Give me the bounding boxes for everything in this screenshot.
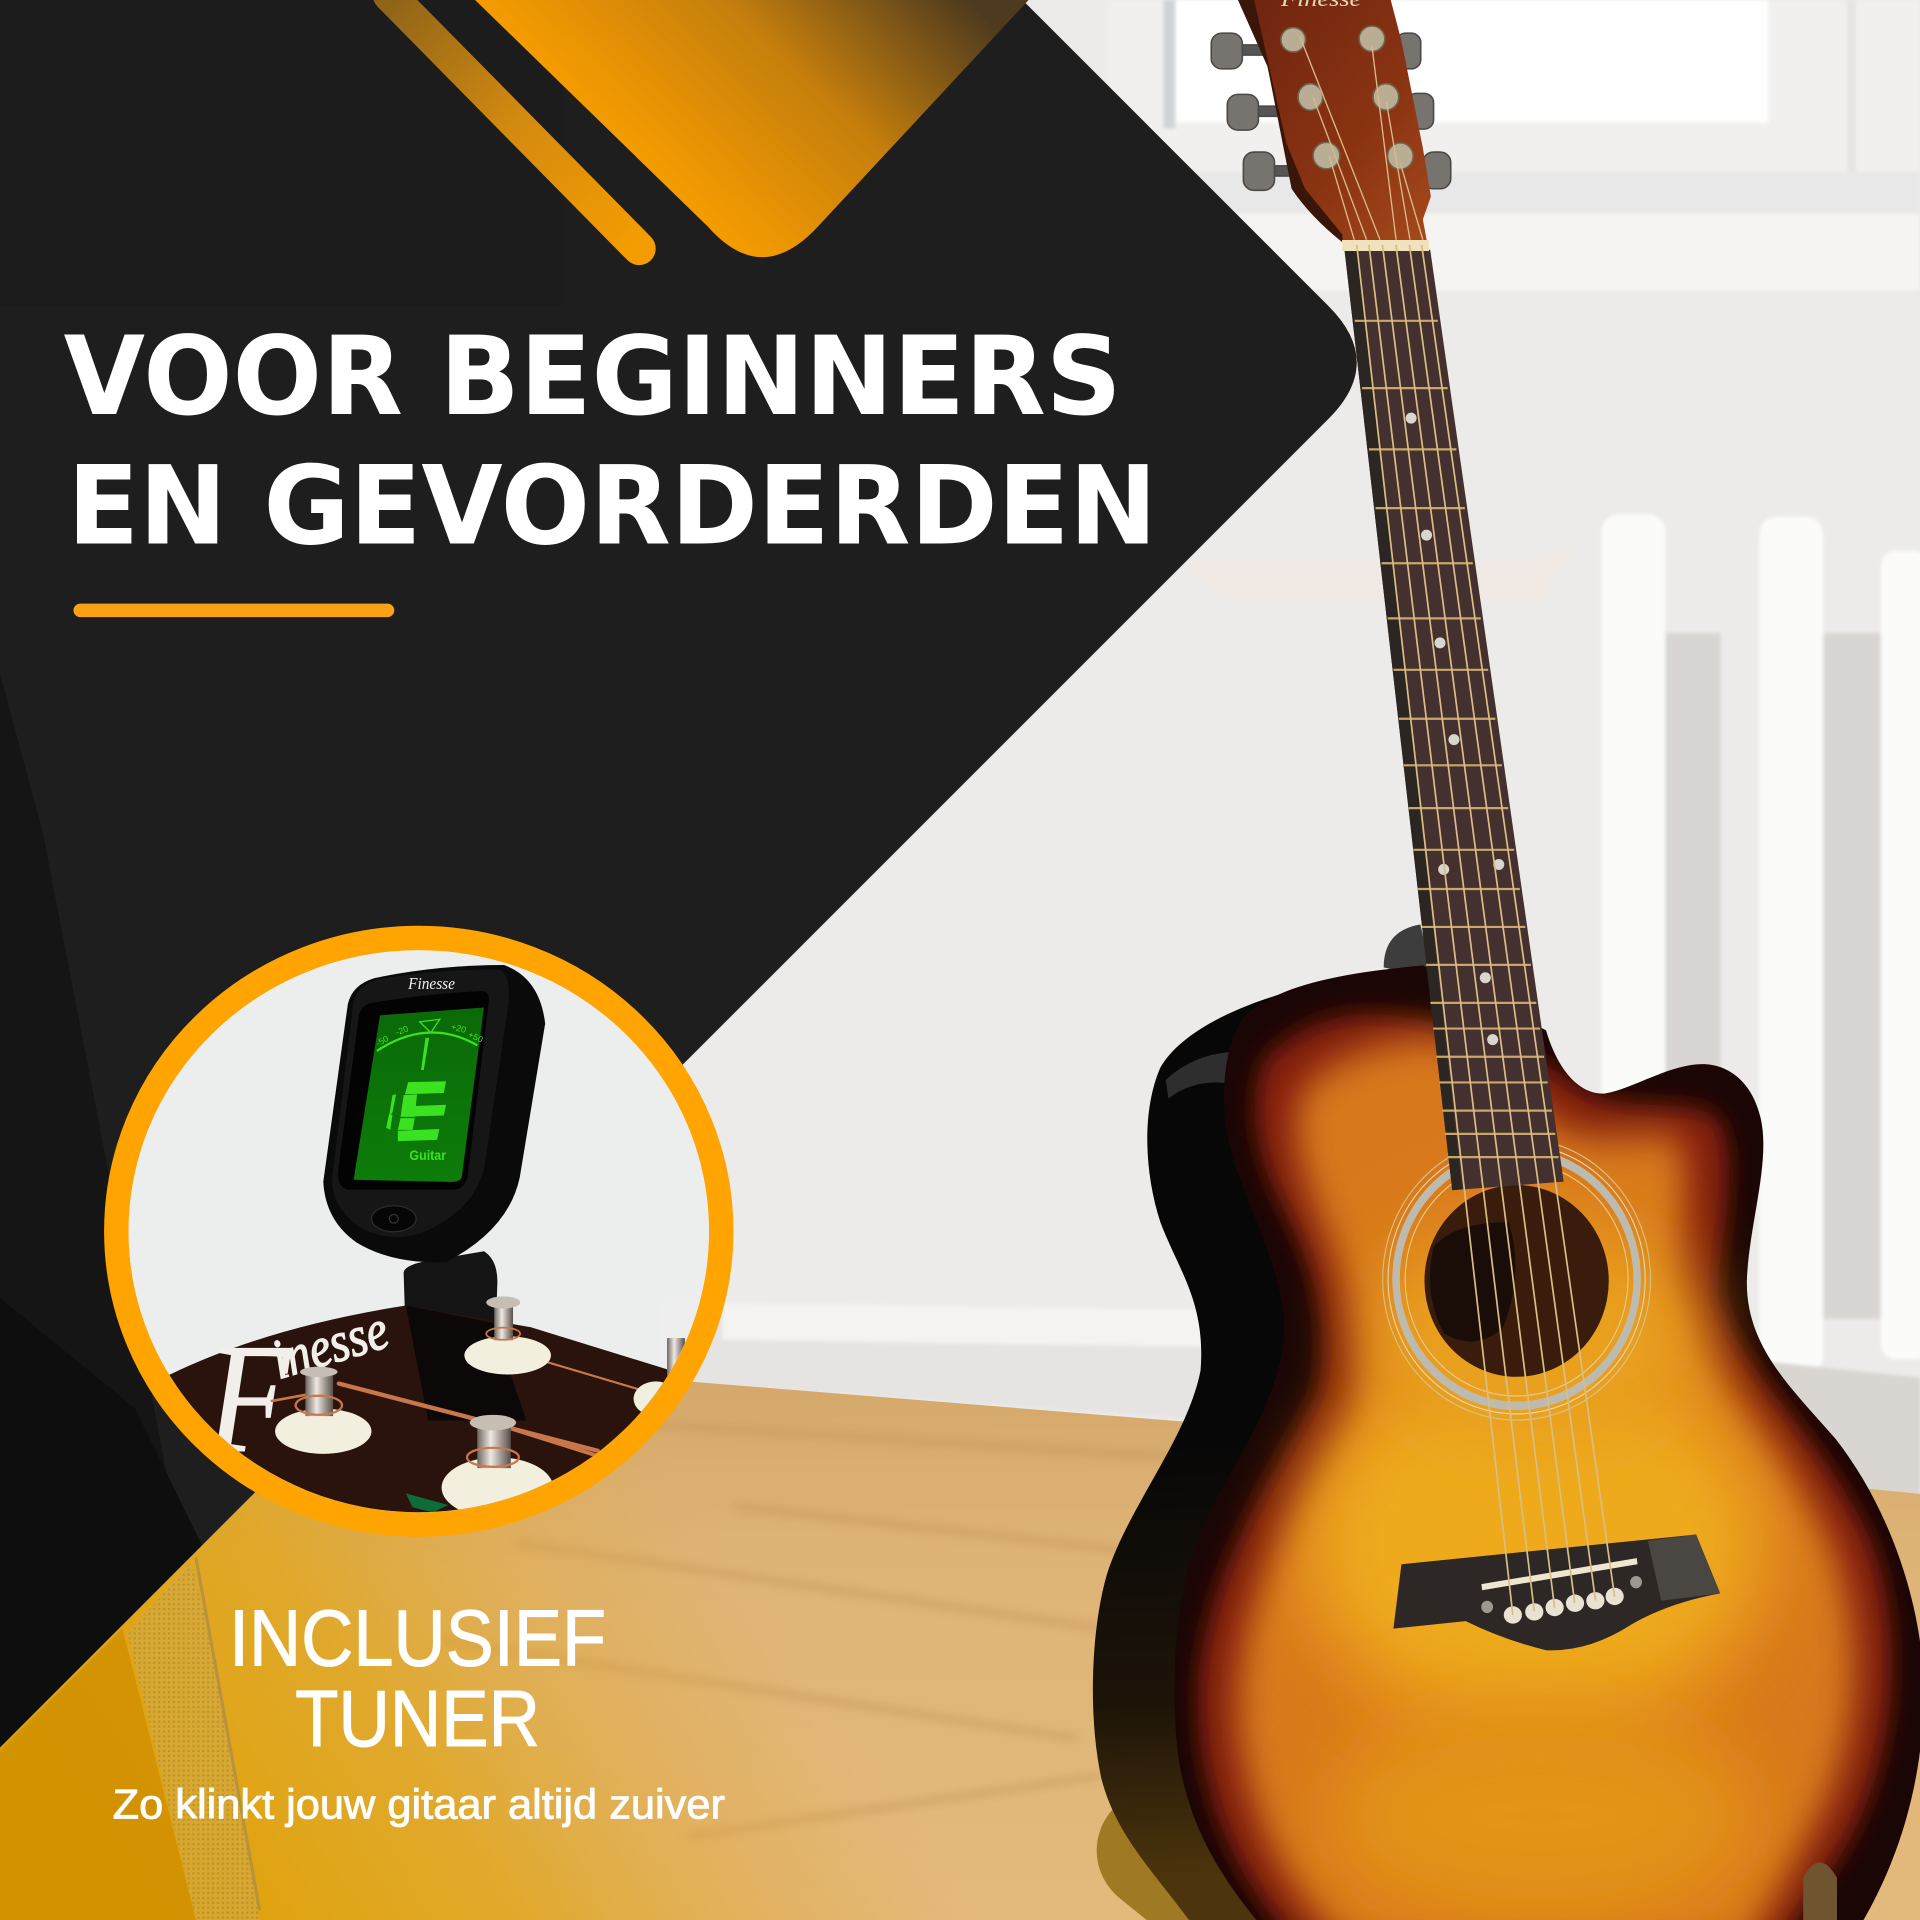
frets	[1355, 321, 1559, 1157]
tuner front face	[332, 969, 509, 1237]
floor in photo	[571, 1377, 667, 1470]
sunburst top	[1160, 950, 1920, 1920]
tuner logo: Finesse	[407, 974, 456, 993]
body side	[1093, 993, 1294, 1920]
window lower rail	[1176, 171, 1920, 213]
tuner body	[323, 965, 545, 1262]
headstock strings	[1300, 36, 1423, 240]
headstock logo	[218, 1321, 389, 1452]
gauge labels: -50	[374, 1033, 390, 1048]
fretboard	[1344, 250, 1564, 1190]
guitar label: Guitar	[409, 1147, 446, 1163]
window and radiator	[686, 0, 1920, 1500]
tuning peg 1	[464, 1296, 551, 1374]
amber gradient overlay	[0, 1445, 1224, 1920]
darker top left area	[0, 0, 563, 306]
tuner device	[323, 965, 545, 1262]
window frame	[1108, 0, 1920, 220]
radiator	[1545, 514, 1920, 1374]
fretboard binding	[1344, 250, 1462, 1190]
baseboard right	[1629, 1347, 1920, 1500]
neck heel	[1384, 924, 1433, 980]
tuning peg 3	[442, 1415, 553, 1518]
amber panels left	[0, 1629, 196, 1920]
caption	[113, 1593, 725, 1827]
copper strings	[270, 1362, 656, 1456]
green screen	[354, 1008, 484, 1182]
clamp post	[404, 1251, 498, 1321]
guitar pick	[406, 1493, 448, 1512]
guitar stand peg left	[1097, 1810, 1219, 1920]
baseboard trim	[722, 1303, 1212, 1347]
bridge	[1393, 1535, 1720, 1650]
ring	[116, 938, 721, 1524]
caption heading line 2: TUNER	[295, 1674, 540, 1763]
circular tuner photo	[102, 922, 750, 1529]
screen bezel	[338, 991, 489, 1190]
headstock plate	[1238, 0, 1431, 242]
radiator pipe	[1188, 545, 1580, 601]
photo backdrop	[128, 950, 709, 1512]
floor planks	[441, 1420, 1176, 1837]
gauge labels: +50	[467, 1029, 485, 1045]
headstock	[1211, 0, 1451, 242]
gauge arc	[377, 1032, 477, 1051]
guitar	[1093, 0, 1920, 1920]
side highlight	[1166, 1052, 1230, 1098]
speaker dark edge	[196, 1558, 260, 1910]
needle	[421, 1038, 429, 1070]
speaker grill band	[127, 1562, 260, 1920]
title line 2: EN GEVORDERDEN	[67, 443, 1157, 570]
title line 1: VOOR BEGINNERS	[64, 313, 1122, 440]
strings	[1357, 245, 1615, 1615]
note letter E display	[386, 1081, 446, 1141]
orange diagonal bar	[389, 0, 639, 249]
headstock reflection	[406, 1306, 526, 1420]
sound hole shadow	[1430, 1222, 1515, 1341]
tuning peg 4	[634, 1338, 685, 1416]
stand peg right	[1803, 1862, 1837, 1920]
title	[64, 313, 1157, 570]
headstock logo: inesse	[264, 1299, 396, 1392]
pointer triangle	[420, 1019, 440, 1033]
headstock dark edge	[1238, 0, 1342, 242]
nut	[1342, 240, 1429, 251]
title underline	[73, 604, 394, 617]
headstock in photo	[169, 1306, 671, 1512]
guitar body	[1093, 950, 1920, 1920]
gauge labels: -20	[394, 1024, 410, 1037]
baseboard left	[686, 1303, 1212, 1420]
window sill	[1078, 214, 1920, 290]
window frame reveal	[1163, 0, 1176, 129]
gauge labels	[374, 1022, 485, 1048]
window right mullion	[1847, 0, 1856, 171]
wooden floor	[0, 1347, 1920, 1920]
sound hole	[1424, 1185, 1609, 1377]
caption subtitle: Zo klinkt jouw gitaar altijd zuiver	[113, 1780, 725, 1827]
caption heading line 1: INCLUSIEF	[229, 1593, 606, 1682]
rosette	[1383, 1138, 1651, 1420]
speaker lower black area	[0, 1298, 202, 1747]
tuner posts	[1281, 26, 1413, 169]
dark speaker on the left	[0, 673, 184, 1747]
baseboard in photo	[669, 1301, 700, 1374]
orange diamond top	[475, 0, 1029, 257]
headstock logo: F	[206, 1313, 292, 1485]
window glass	[1176, 0, 1768, 122]
fret markers	[1406, 413, 1504, 1045]
tuning peg 2	[275, 1367, 371, 1454]
gauge labels: +20	[450, 1022, 467, 1035]
dark diagonal panel	[0, 0, 1357, 1747]
tuning knobs	[1211, 33, 1451, 190]
power button	[371, 1206, 416, 1232]
